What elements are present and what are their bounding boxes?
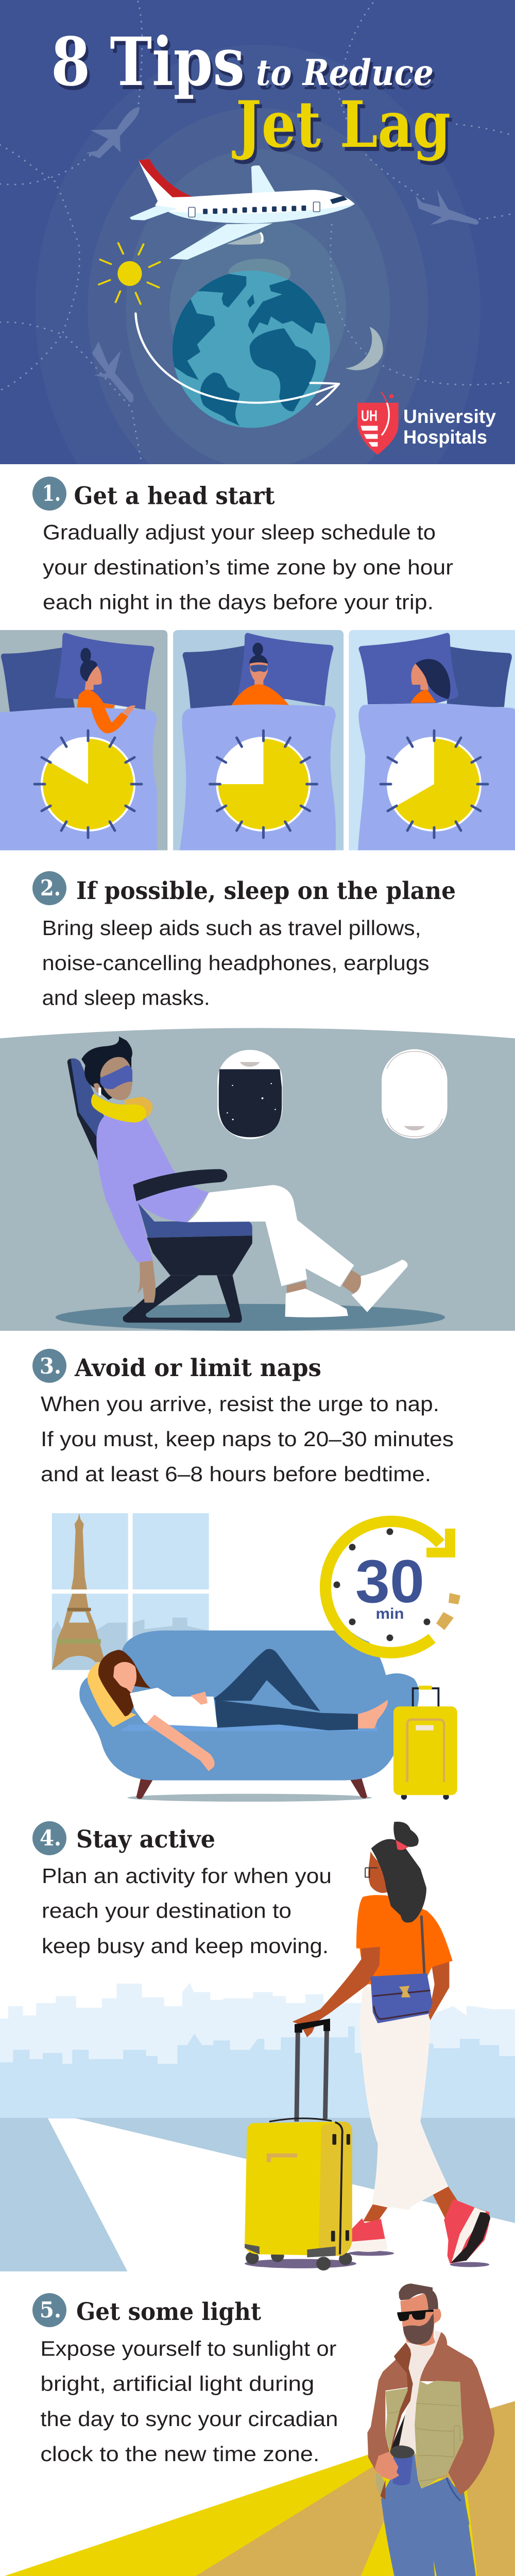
badge 1 xyxy=(32,477,66,511)
body text 3: If you must, keep naps to 20–30 minutes xyxy=(41,1427,454,1451)
body text 4 xyxy=(42,1864,332,1958)
section 4: stay active xyxy=(0,1821,515,2272)
shadows xyxy=(245,2251,489,2268)
body text 2: and sleep masks. xyxy=(42,986,210,1010)
badge 1: 1. xyxy=(42,481,61,506)
title line: to Reduce: to Reduce xyxy=(256,52,434,94)
body text 1: your destination’s time zone by one hour xyxy=(43,555,453,579)
panel: sleeper 2 xyxy=(173,630,344,850)
panel: sleeper 3 xyxy=(349,630,515,850)
heading 2: If possible, sleep on the plane xyxy=(76,877,456,905)
section 1: get a head start xyxy=(0,477,515,850)
man torso with coffee xyxy=(367,2283,494,2524)
badge 4: 4. xyxy=(40,1825,61,1851)
rolling suitcase xyxy=(245,2019,352,2270)
illustration: light rays and legs xyxy=(0,2401,515,2576)
body text 5 xyxy=(40,2337,338,2466)
seat xyxy=(67,1058,252,1323)
light rays xyxy=(0,2401,515,2576)
body text 1 xyxy=(43,520,453,614)
heading 3: Avoid or limit naps xyxy=(74,1354,321,1382)
icon: sun xyxy=(99,243,160,304)
body text 1: Gradually adjust your sleep schedule to xyxy=(43,520,436,544)
chart: clock 2, sleep shifted two hours xyxy=(210,731,317,838)
chart: clock 3, sleep shifted three hours xyxy=(381,731,488,838)
chart: clock 1, sleep shifted one hour xyxy=(35,731,142,838)
logo: University Hospitals: Hospitals xyxy=(403,427,487,448)
city skyline xyxy=(0,1982,515,2119)
icon: faint plane upper left xyxy=(86,107,140,158)
logo: University Hospitals: UH xyxy=(361,408,377,425)
heading 5: Get some light xyxy=(76,2298,261,2326)
panel: header xyxy=(0,0,515,464)
title xyxy=(51,23,451,162)
window with Eiffel Tower xyxy=(52,1513,209,1670)
logo: University Hospitals: University xyxy=(403,406,496,427)
badge 2: 2. xyxy=(40,875,61,901)
tarmac xyxy=(0,2118,515,2272)
title line: Jet Lag: Jet Lag xyxy=(232,88,451,162)
icon: moon xyxy=(346,327,383,370)
illustration: napping on sofa xyxy=(52,1513,457,1802)
illustration: walking with luggage xyxy=(0,1822,515,2272)
yellow suitcase xyxy=(393,1686,457,1800)
panel: sleeper 1 xyxy=(0,630,167,850)
sofa xyxy=(79,1631,419,1802)
body text 5: clock to the new time zone. xyxy=(40,2442,319,2466)
body text 1: each night in the days before your trip. xyxy=(43,590,434,614)
shoulder bag xyxy=(370,1973,433,2023)
body text 4: keep busy and keep moving. xyxy=(42,1934,329,1958)
body text 2: Bring sleep aids such as travel pillows, xyxy=(42,916,421,940)
icon: 30 minute timer: 30 xyxy=(355,1548,424,1616)
icon: 30 minute timer: min xyxy=(376,1605,404,1622)
body text 3: and at least 6–8 hours before bedtime. xyxy=(41,1462,431,1486)
traveler woman xyxy=(293,1822,490,2264)
icon: closed window xyxy=(382,1049,448,1139)
icon: faint plane right xyxy=(416,189,479,225)
icon: globe xyxy=(167,259,332,428)
body text 5: Expose yourself to sunlight or xyxy=(40,2337,336,2361)
body text 3 xyxy=(41,1392,454,1486)
badge 2 xyxy=(32,871,66,905)
body text 3: When you arrive, resist the urge to nap. xyxy=(41,1392,439,1416)
section 5: get some light xyxy=(0,2283,515,2576)
section 3: avoid or limit naps xyxy=(32,1349,460,1802)
floor shadow xyxy=(56,1304,445,1331)
body text 5: bright, artificial light during xyxy=(40,2372,314,2396)
napping woman xyxy=(88,1649,388,1771)
arrow: around the globe xyxy=(135,313,339,404)
heading 4: Stay active xyxy=(76,1825,215,1854)
icon: 30 minute timer xyxy=(325,1521,460,1653)
illustration: three sleepers xyxy=(0,630,515,850)
icon: airplane xyxy=(130,159,355,260)
header artwork xyxy=(0,1,511,464)
illustration: sleeper in plane seat xyxy=(0,1028,515,1331)
section 2: sleep on the plane xyxy=(0,871,515,1331)
badge 4 xyxy=(32,1821,66,1855)
body text 4: Plan an activity for when you xyxy=(42,1864,332,1888)
badge 3: 3. xyxy=(40,1353,61,1379)
heading 1: Get a head start xyxy=(74,482,275,510)
man legs and boots xyxy=(381,2485,493,2576)
body text 2: noise-cancelling headphones, earplugs xyxy=(42,951,430,975)
icon: night window xyxy=(217,1050,282,1139)
badge 3 xyxy=(32,1349,66,1383)
icon: faint plane lower left xyxy=(92,342,133,402)
body text 5: the day to sync your circadian xyxy=(40,2407,338,2431)
traveler xyxy=(81,1037,407,1317)
badge 5 xyxy=(32,2293,66,2327)
title line: 8 Tips: 8 Tips xyxy=(51,23,245,101)
logo: University Hospitals xyxy=(357,392,496,455)
badge 5: 5. xyxy=(40,2297,61,2323)
body text 2 xyxy=(42,916,430,1010)
body text 4: reach your destination to xyxy=(42,1899,291,1922)
